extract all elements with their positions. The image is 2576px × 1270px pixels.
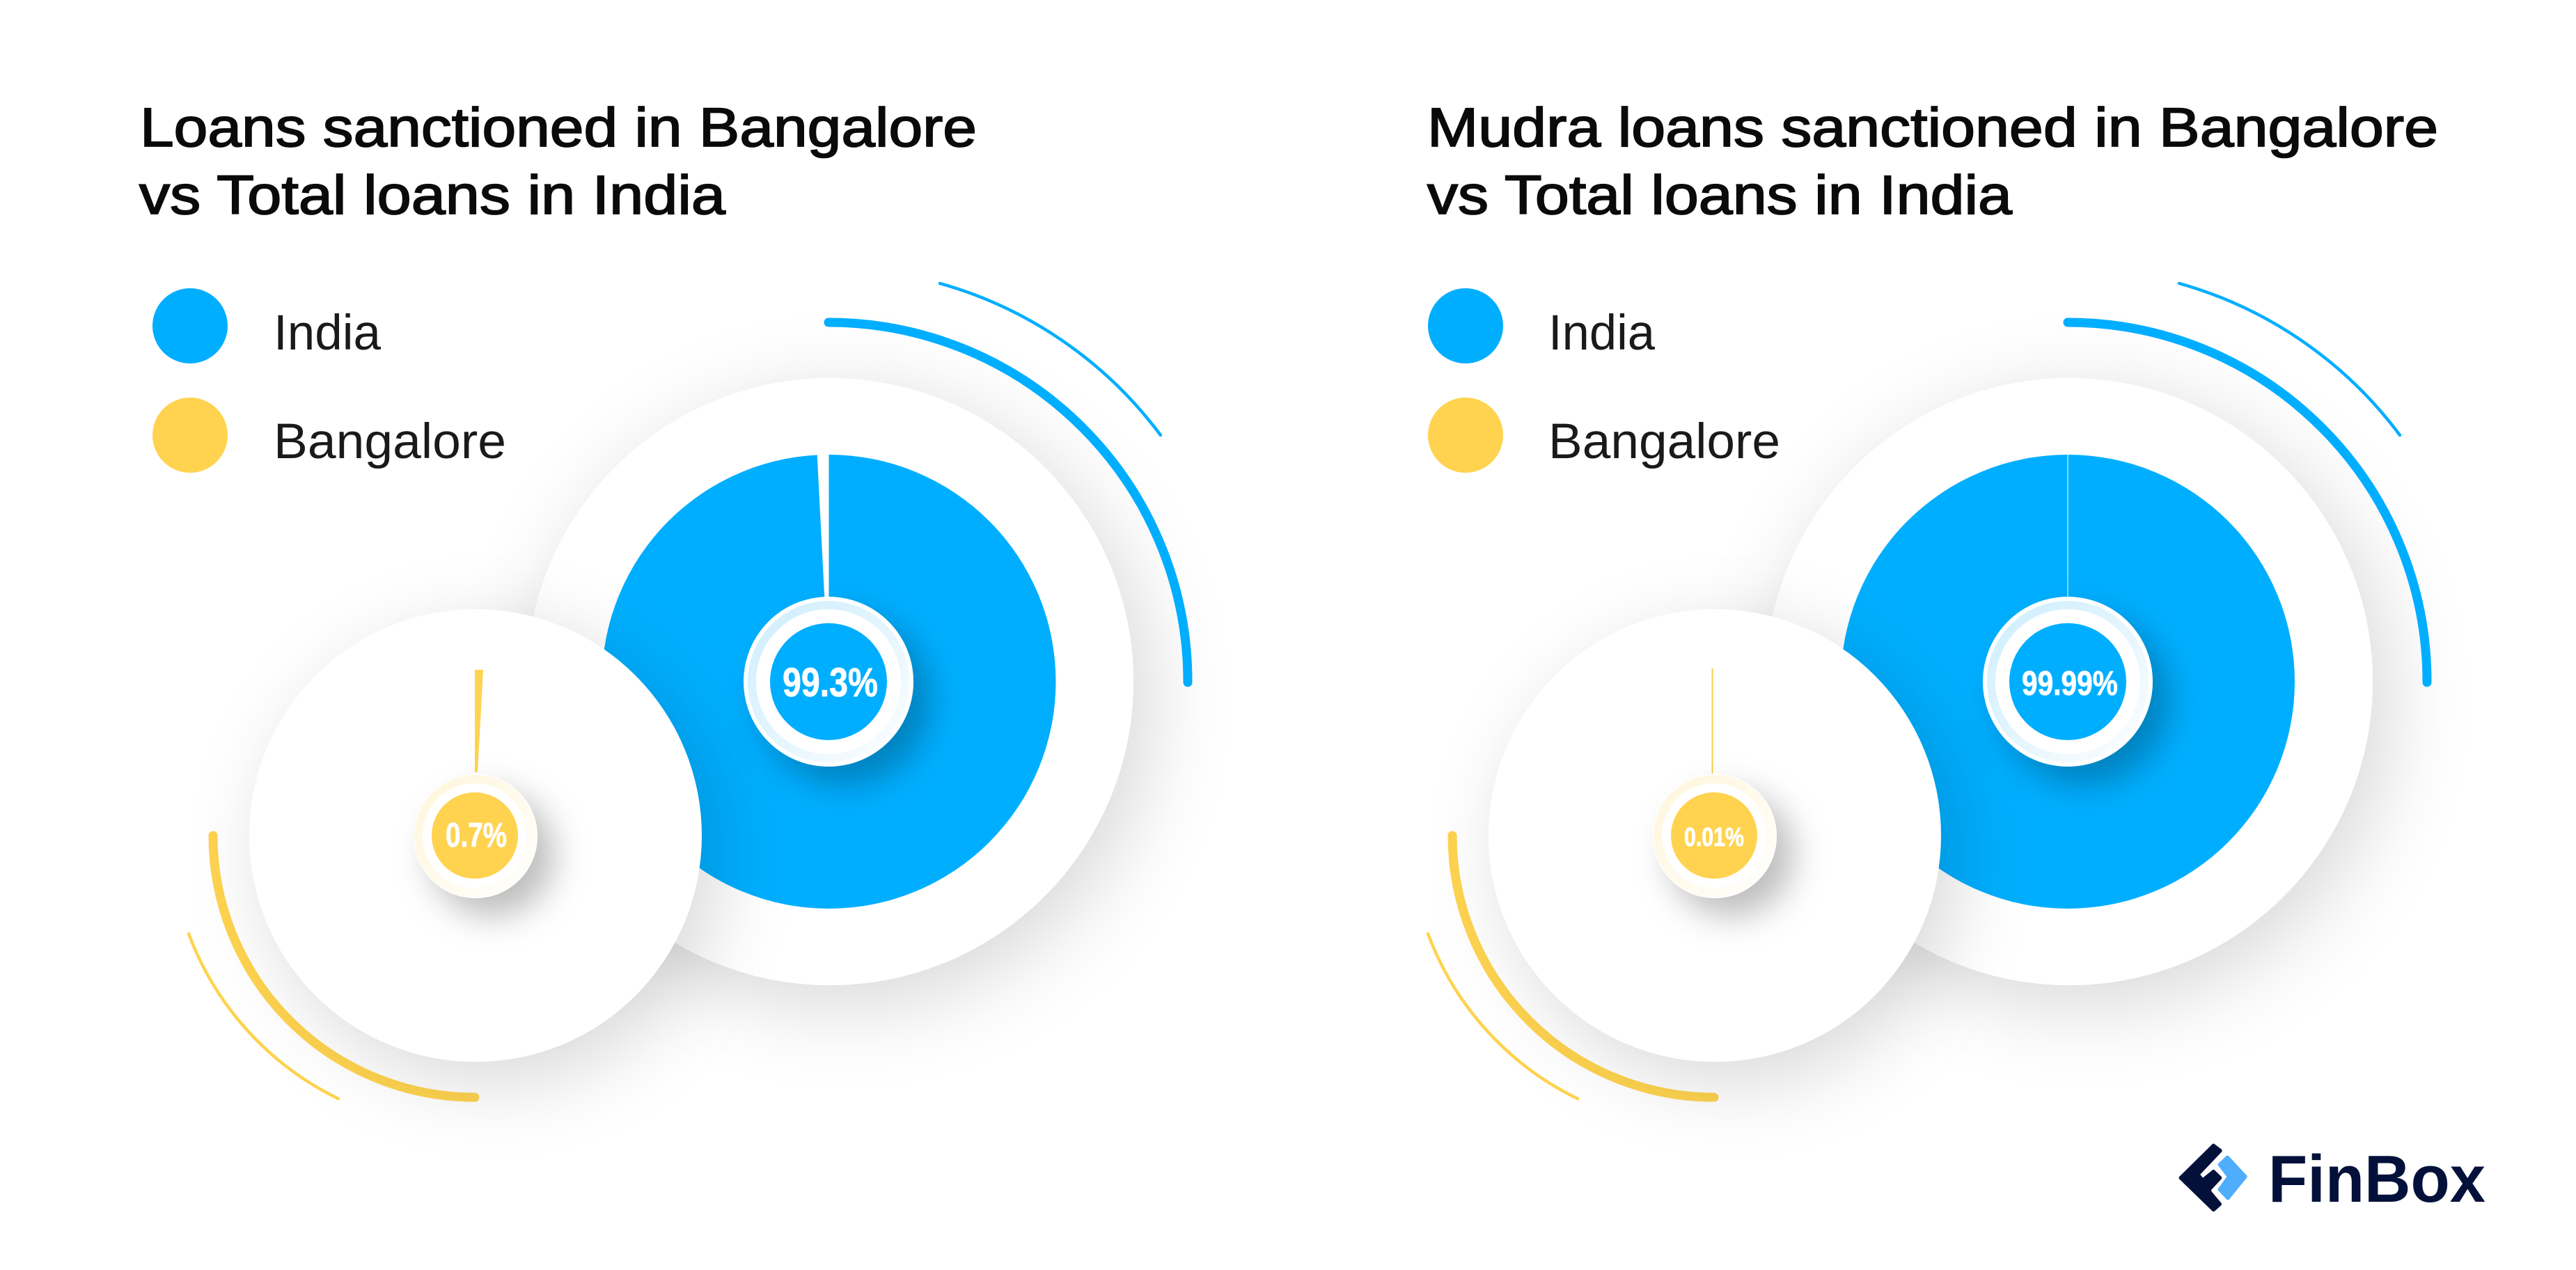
panel: loans in Bangalore vs India bbox=[139, 96, 1188, 1099]
panel: Mudra loans in Bangalore vs India bbox=[1427, 96, 2438, 1099]
logo: FinBox bbox=[2181, 1142, 2485, 1216]
badge: 0.7% bbox=[414, 774, 537, 898]
disc: India backing circle bbox=[1766, 378, 2373, 985]
badge: 0.7%: 0.7% bbox=[446, 817, 507, 854]
icon: FinBox mark bbox=[2181, 1145, 2245, 1209]
legend: left panel bbox=[152, 288, 506, 473]
arc: yellow outer decoration bbox=[189, 836, 475, 1099]
title: right panel: vs Total loans in India bbox=[1427, 164, 2012, 226]
badge: 99.99% bbox=[1983, 597, 2153, 767]
disc: Bangalore circle bbox=[249, 609, 702, 1062]
title: left panel: Loans sanctioned in Bangalore bbox=[140, 96, 977, 158]
wordmark: FinBox bbox=[2268, 1142, 2485, 1216]
arc: blue outer decoration bbox=[2068, 283, 2427, 682]
legend: right panel: Bangalore bbox=[1548, 414, 1780, 469]
legend: right panel bbox=[1428, 288, 1780, 473]
disc: India backing circle bbox=[526, 378, 1133, 985]
badge: 99.3% bbox=[744, 597, 913, 767]
legend: right panel: India bbox=[1548, 306, 1656, 361]
badge: 99.99%: 99.99% bbox=[2022, 665, 2118, 703]
legend: left panel: Bangalore bbox=[274, 414, 506, 469]
pie: India 99.3% bbox=[602, 446, 1055, 909]
pie: India 99.99% bbox=[1841, 455, 2295, 909]
legend: left panel: India bbox=[274, 306, 382, 361]
title: left panel: vs Total loans in India bbox=[139, 164, 725, 226]
arc: yellow outer decoration bbox=[1428, 836, 1714, 1099]
badge: 0.01% bbox=[1653, 774, 1777, 898]
title: left panel bbox=[139, 96, 977, 226]
title: right panel bbox=[1427, 96, 2438, 226]
badge: 99.3%: 99.3% bbox=[783, 660, 878, 705]
badge: 0.01%: 0.01% bbox=[1684, 823, 1744, 852]
pie slice: Bangalore 0.01% bbox=[1711, 668, 1713, 774]
arc: blue outer decoration bbox=[828, 283, 1188, 682]
title: right panel: Mudra loans sanctioned in Bangalore bbox=[1427, 96, 2438, 158]
disc: Bangalore circle bbox=[1489, 609, 1941, 1062]
pie slice: Bangalore 0.7% bbox=[475, 670, 483, 772]
